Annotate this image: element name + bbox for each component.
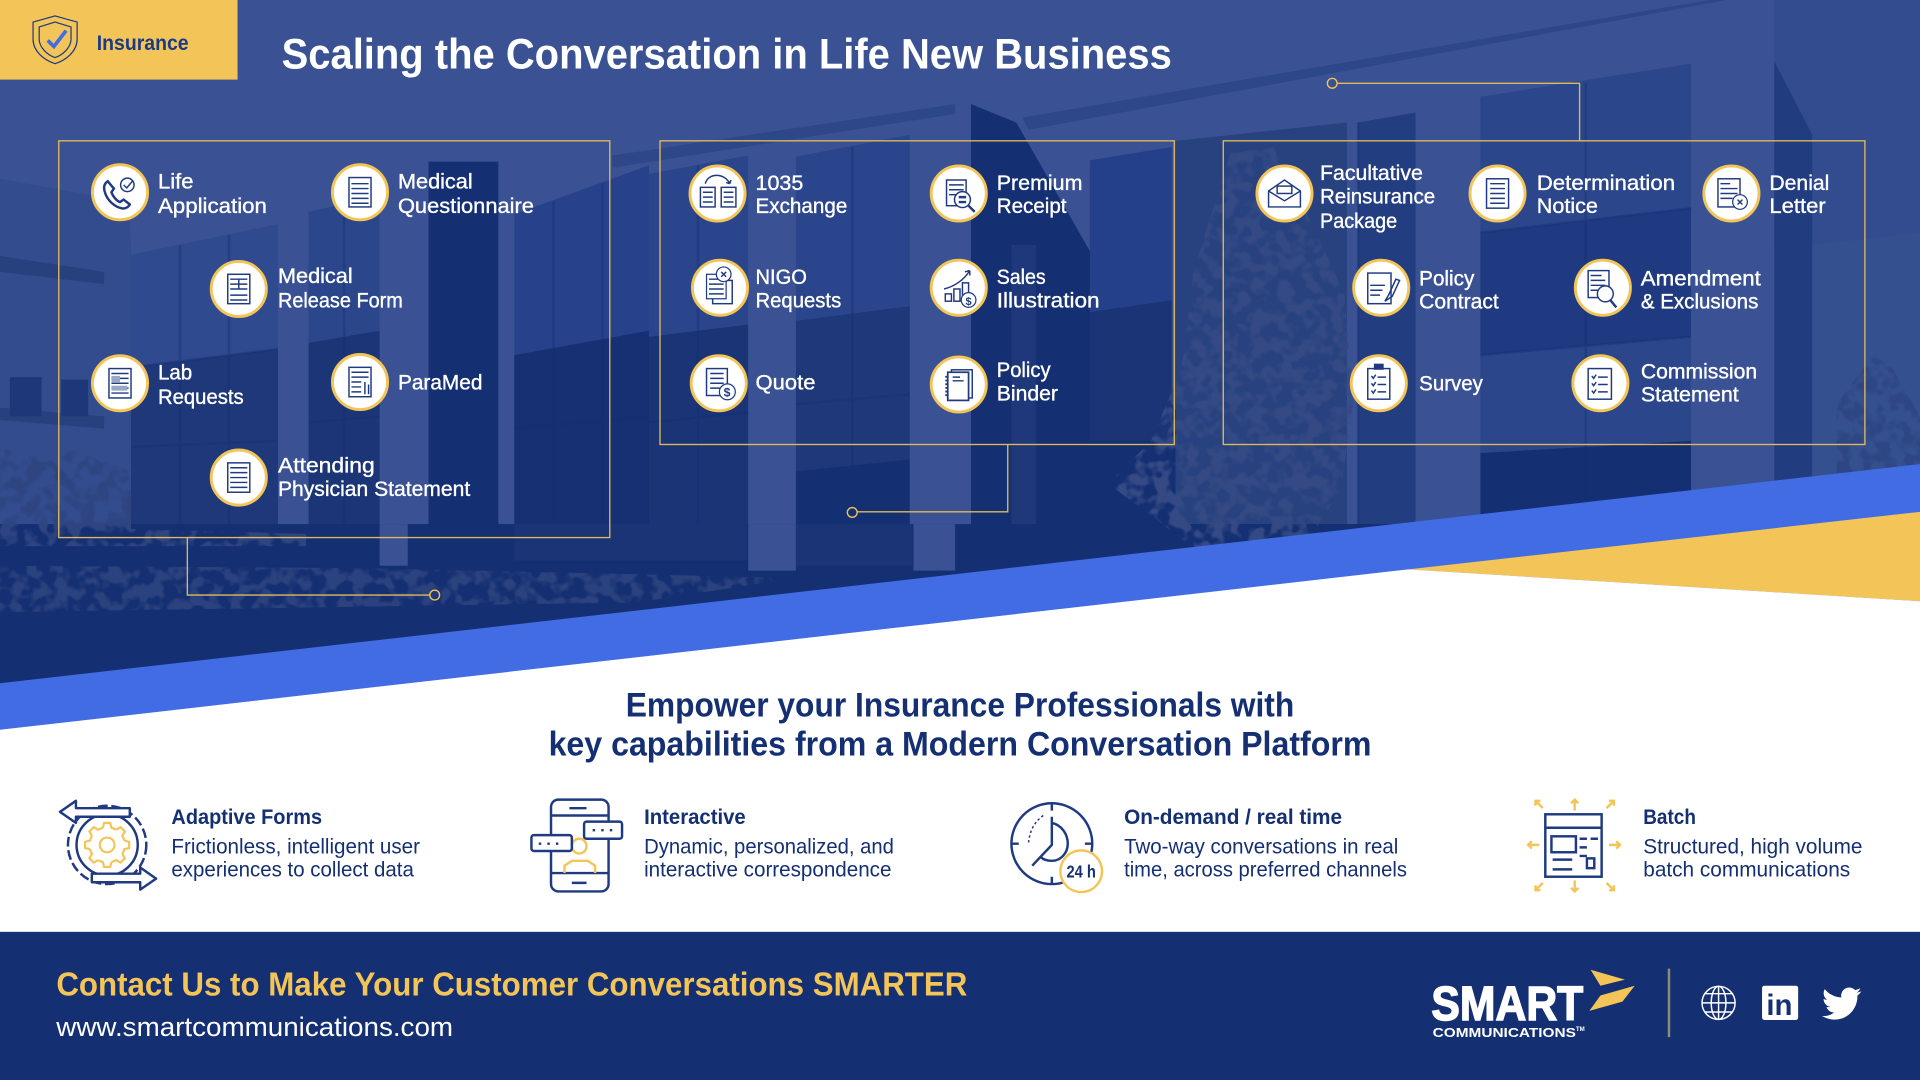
item: Quote: $ (724, 386, 731, 400)
icon: gear with arrows (60, 801, 156, 890)
item: Denial Letter: Denial (1769, 171, 1829, 195)
capability: adaptive forms (60, 801, 420, 890)
item: Life Application: Application (158, 194, 267, 218)
item: Life Application: Life (158, 170, 193, 194)
item: Policy Binder (931, 357, 1058, 412)
item: Policy Contract: Contract (1419, 290, 1499, 314)
item: Policy Contract (1354, 260, 1499, 315)
item: Facultative Reinsurance Package: Reinsurance (1320, 184, 1435, 208)
item: NIGO Requests: NIGO (756, 265, 807, 289)
capability: interactive: Interactive (644, 806, 746, 829)
item: Medical Release Form (211, 261, 403, 317)
capability: on-demand: Two-way conversations in real (1124, 835, 1398, 858)
icon: linkedin: in (1766, 989, 1792, 1022)
item: Quote (691, 356, 816, 411)
item: Commission Statement: Statement (1641, 383, 1739, 407)
item: Policy Binder: Binder (997, 381, 1058, 405)
insurance tag (0, 0, 238, 80)
background: building photo (0, 0, 1920, 735)
item: Sales Illustration: Illustration (997, 288, 1100, 312)
panel: new business documents (660, 141, 1174, 444)
item: Sales Illustration: $ (966, 296, 972, 308)
icon: twitter (1822, 988, 1861, 1020)
yellow diagonal accent (1408, 512, 1920, 601)
capability: adaptive forms: Frictionless, intelligent user (171, 835, 420, 858)
logo: smart communications (1431, 970, 1635, 1040)
capability: batch (1528, 800, 1862, 891)
capability: batch: batch communications (1643, 859, 1850, 882)
heading: empower: Empower your Insurance Professionals with (626, 686, 1294, 724)
item: Attending Physician Statement (211, 450, 470, 505)
capability: batch: Structured, high volume (1643, 835, 1862, 858)
logo: smart communications: SMART (1431, 978, 1583, 1031)
item: Attending Physician Statement: Attending (278, 454, 375, 478)
item: ParaMed: ParaMed (398, 370, 482, 394)
item: Facultative Reinsurance Package (1257, 161, 1435, 233)
item: Determination Notice: Notice (1537, 194, 1598, 218)
foliage and lawn (0, 448, 306, 546)
icon: document with arrows (1528, 800, 1620, 891)
heading: empower: key capabilities from a Modern Conversation Platform (549, 726, 1371, 764)
window mullions (131, 83, 1691, 588)
item: Lab Requests (92, 356, 244, 411)
item: Medical Questionnaire: Questionnaire (398, 194, 534, 218)
item: Medical Release Form: Release Form (278, 288, 403, 312)
item: Quote: Quote (756, 370, 816, 394)
item: Determination Notice (1470, 166, 1675, 221)
item: NIGO Requests (692, 260, 841, 315)
item: Premium Receipt: Premium (997, 171, 1082, 195)
footer call to action: Contact Us to Make Your Customer Conversations SMARTER (56, 967, 967, 1004)
item: Life Application (92, 165, 267, 220)
divider (1668, 969, 1670, 1037)
panel: application documents (59, 141, 610, 538)
capability: interactive (531, 800, 894, 891)
title: Scaling the Conversation in Life New Business (282, 31, 1172, 79)
footer url: www.smartcommunications.com (55, 1012, 453, 1042)
capability: interactive: Dynamic, personalized, and (644, 835, 894, 858)
footer band (0, 932, 1920, 1080)
capability: on-demand (1011, 803, 1407, 892)
icon: clock 24h (1011, 803, 1102, 892)
white content area (0, 569, 1920, 932)
item: Policy Contract: Policy (1419, 266, 1475, 290)
capability: adaptive forms: experiences to collect data (171, 859, 414, 882)
item: Medical Questionnaire (332, 165, 534, 220)
insurance tag: Insurance (97, 32, 189, 55)
capability: on-demand: On-demand / real time (1124, 806, 1342, 829)
capability: batch: Batch (1643, 806, 1696, 829)
item: Commission Statement (1573, 356, 1757, 411)
logo: smart communications: TM (1576, 1026, 1585, 1033)
item: Denial Letter: Letter (1769, 194, 1826, 218)
item: Amendment and Exclusions: Amendment (1641, 266, 1761, 290)
item: 1035 Exchange: 1035 (756, 171, 803, 195)
item: Determination Notice: Determination (1537, 171, 1675, 195)
item: Survey: Survey (1419, 372, 1483, 396)
capability: on-demand: time, across preferred channels (1124, 859, 1407, 882)
icon: linkedin (1762, 986, 1798, 1022)
item: Amendment and Exclusions: & Exclusions (1641, 290, 1758, 314)
connector: panel two (847, 444, 1008, 517)
heading: empower (549, 686, 1371, 764)
item: Premium Receipt (931, 166, 1082, 221)
icon: phone with chat bubbles (531, 800, 622, 891)
item: Premium Receipt: Receipt (997, 194, 1067, 218)
capability: interactive: interactive correspondence (644, 859, 891, 882)
item: Policy Binder: Policy (997, 358, 1051, 382)
item: Sales Illustration (931, 260, 1100, 315)
blue diagonal band (0, 464, 1920, 730)
icon: clock 24h: 24 h (1067, 861, 1096, 881)
item: Lab Requests: Lab (158, 361, 192, 385)
item: Facultative Reinsurance Package: Package (1320, 209, 1397, 233)
connector: panel three (1327, 78, 1580, 141)
connector: panel one (187, 538, 440, 600)
item: ParaMed (332, 354, 482, 410)
item: Medical Release Form: Medical (278, 264, 353, 288)
item: Commission Statement: Commission (1641, 359, 1757, 383)
capability: adaptive forms: Adaptive Forms (171, 806, 322, 829)
icon: globe (1702, 986, 1735, 1019)
item: Medical Questionnaire: Medical (398, 170, 473, 194)
item: Amendment and Exclusions (1575, 260, 1761, 315)
item: 1035 Exchange (690, 166, 847, 221)
item: Survey (1351, 356, 1483, 411)
item: Facultative Reinsurance Package: Facultative (1320, 161, 1423, 185)
icon: shield (33, 16, 77, 64)
item: 1035 Exchange: Exchange (756, 194, 847, 218)
item: Sales Illustration: Sales (997, 265, 1046, 289)
panel: policy documents (1223, 141, 1865, 444)
item: NIGO Requests: Requests (756, 288, 841, 312)
logo: smart communications: COMMUNICATIONS (1433, 1025, 1576, 1040)
item: Denial Letter (1704, 166, 1829, 221)
item: Attending Physician Statement: Physician Statement (278, 477, 470, 501)
item: Lab Requests: Requests (158, 385, 244, 409)
